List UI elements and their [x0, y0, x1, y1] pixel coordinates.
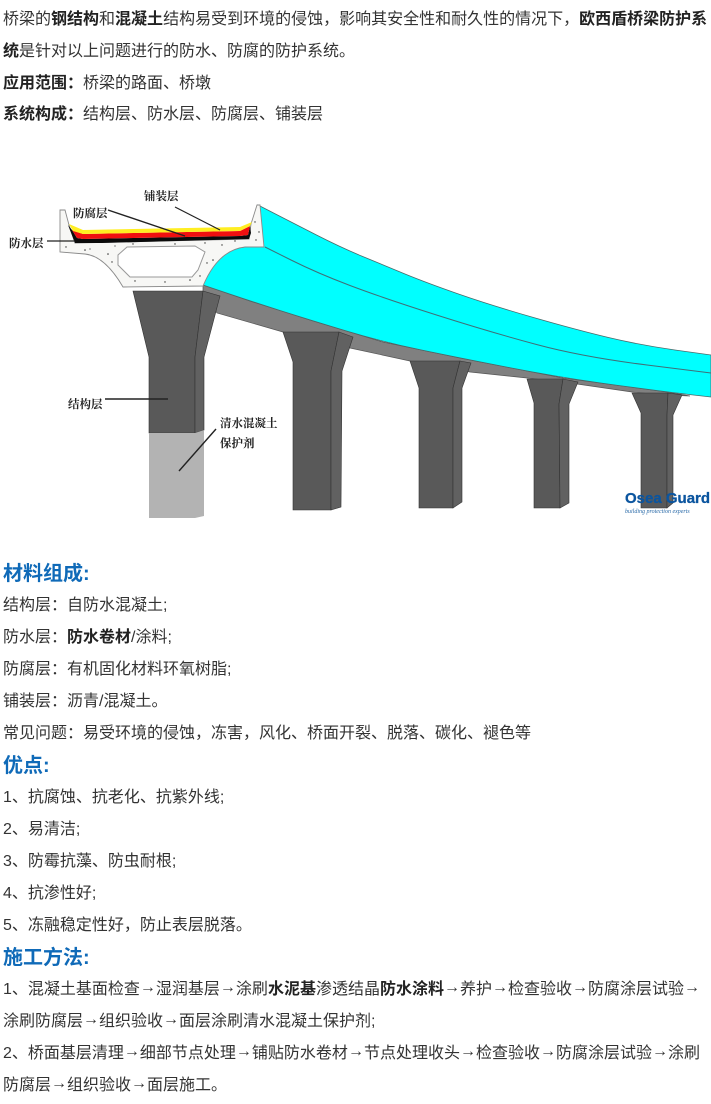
heading: materials: 材料组成: [3, 563, 90, 585]
pier 3 [410, 361, 471, 508]
pier 2 [283, 332, 353, 510]
anticorrosion layer: red [72, 226, 250, 239]
advantages list: 2、易清洁; [3, 821, 80, 838]
materials list: 防水层：防水卷材/涂料; [3, 629, 172, 646]
pier 1 [133, 291, 220, 518]
waterproof layer: black [68, 225, 251, 243]
pier 5 [632, 393, 682, 508]
cyan road surface [203, 205, 711, 397]
materials list [3, 596, 531, 742]
label: 防水层: 防水层 [9, 236, 44, 250]
label: 防腐层: 防腐层 [73, 206, 108, 220]
materials list: 常见问题：易受环境的侵蚀，冻害，风化、桥面开裂、脱落、碳化、褪色等 [3, 725, 531, 742]
paving layer: yellow [69, 222, 252, 234]
advantages list: 4、抗渗性好; [3, 885, 96, 902]
bridge diagram [9, 189, 711, 518]
logo: Osea Guard: Osea Guard [625, 490, 710, 507]
materials list: 结构层：自防水混凝土; [3, 597, 167, 614]
bridge underside [203, 285, 690, 396]
construction steps: 2、桥面基层清理→细部节点处理→铺贴防水卷材→节点处理收头→检查验收→防腐涂层试验→涂刷 [3, 1043, 700, 1062]
construction steps: 涂刷防腐层→组织验收→面层涂刷清水混凝土保护剂; [3, 1011, 375, 1030]
materials list: 防腐层：有机固化材料环氧树脂; [3, 661, 231, 678]
heading: advantages: 优点: [3, 755, 50, 777]
intro text: 系统构成：结构层、防水层、防腐层、铺装层 [3, 106, 323, 123]
construction steps [3, 979, 700, 1094]
label: 铺装层: 铺装层 [144, 189, 179, 203]
advantages list: 1、抗腐蚀、抗老化、抗紫外线; [3, 789, 224, 806]
deck cross-section [60, 205, 264, 287]
leader lines [47, 207, 220, 471]
intro text [3, 10, 707, 123]
construction steps: 防腐层→组织验收→面层施工。 [3, 1075, 227, 1094]
construction steps: 1、混凝土基面检查→湿润基层→涂刷水泥基渗透结晶防水涂料→养护→检查验收→防腐涂层试验→ [3, 979, 700, 998]
pier 4 [527, 379, 578, 508]
advantages list: 5、冻融稳定性好，防止表层脱落。 [3, 917, 252, 934]
advantages list: 3、防霉抗藻、防虫耐根; [3, 853, 176, 870]
label: 结构层: 结构层 [68, 397, 103, 411]
label: 清水混凝土保护剂: 清水混凝土 [220, 418, 278, 430]
intro text: 应用范围：桥梁的路面、桥墩 [3, 75, 211, 92]
materials list: 铺装层：沥青/混凝土。 [3, 693, 167, 710]
logo: Osea Guard [625, 490, 710, 515]
heading: construction method: 施工方法: [3, 947, 90, 969]
advantages list [3, 788, 252, 934]
intro text: 桥梁的钢结构和混凝土结构易受到环境的侵蚀，影响其安全性和耐久性的情况下，欧西盾桥梁防护系 [3, 11, 707, 28]
logo: Osea Guard: building protection experts [625, 509, 690, 515]
label: 清水混凝土保护剂: 保护剂 [220, 436, 255, 450]
intro text: 统是针对以上问题进行的防水、防腐的防护系统。 [3, 43, 355, 60]
